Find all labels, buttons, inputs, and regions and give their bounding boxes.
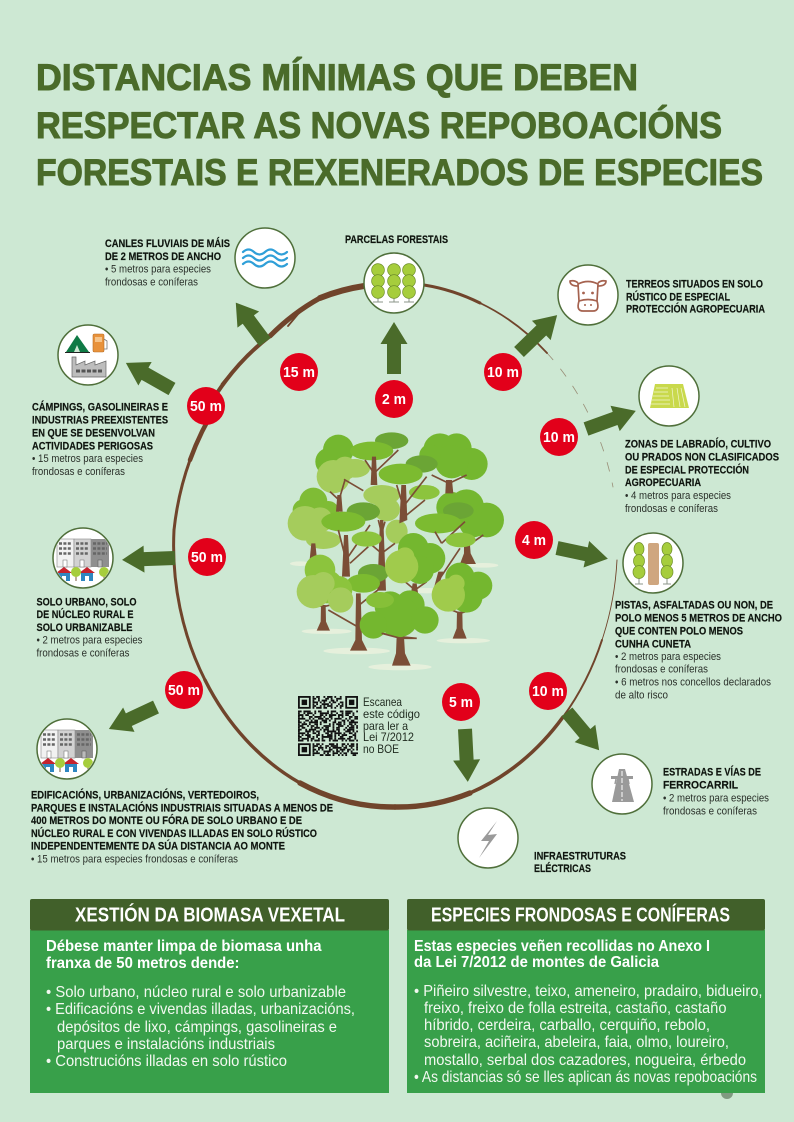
QR caption: no BOE (363, 742, 399, 756)
label: pistas (615, 600, 782, 702)
panel: xestión da biomasa vexetal (30, 899, 389, 1093)
label: zonas de labradío: • 4 metros para especies (625, 490, 731, 502)
arrow: to pistas (554, 535, 611, 572)
label: pistas: frondosas e coníferas (615, 664, 708, 676)
badge: 50 m edificacións (165, 671, 203, 709)
QR caption: para ler a (363, 719, 408, 733)
QR caption (363, 695, 420, 756)
label: canles fluviais (105, 237, 230, 288)
badge: 10 m terreos (484, 353, 522, 391)
icon: buildings and houses (solo urbano) (53, 528, 113, 588)
badge: 10 m terreos: 10 m (487, 364, 519, 381)
label: terreos: TERREOS SITUADOS EN SOLO (626, 278, 763, 290)
label: infraestruturas eléctricas: INFRAESTRUTURAS (534, 850, 626, 862)
label: edificacións (31, 788, 333, 866)
badge: 50 m solo urbano: 50 m (191, 549, 223, 566)
label: terreos: PROTECCIÓN AGROPECUARIA (626, 302, 765, 316)
arrow: to cámpings (119, 351, 179, 401)
label: estradas: FERROCARRIL (663, 780, 738, 792)
label: solo urbano (36, 596, 143, 660)
panel: especies frondosas e coníferas: híbrido, cerdeira, carballo, cerquiño, rebolo, (424, 1017, 710, 1034)
badge: 10 m labradío (540, 418, 578, 456)
badge: 50 m edificacións: 50 m (168, 682, 200, 699)
badge: 15 m (280, 353, 318, 391)
label: edificacións: 400 METROS DO MONTE OU FÓRA DE SOLO URBANO E DE (31, 814, 302, 827)
label: pistas: • 2 metros para especies (615, 651, 721, 663)
arrow: to infraestruturas eléctricas (452, 728, 481, 783)
label: cámpings: EN QUE SE DESENVOLVAN (32, 428, 155, 440)
badge: 50 m cámpings (187, 387, 225, 425)
badge: 50 m cámpings: 50 m (190, 398, 222, 415)
label: estradas: ESTRADAS E VÍAS DE (663, 766, 761, 778)
back canopies (288, 432, 504, 549)
title (36, 57, 763, 193)
label: cámpings: • 15 metros para especies (32, 453, 143, 465)
icon: cow head (558, 265, 618, 325)
icon: lightning bolt (458, 808, 518, 868)
label: zonas de labradío (625, 438, 779, 515)
panel header (407, 899, 765, 930)
icon: cultivated field (639, 366, 699, 426)
icon: tent, petrol pump and factory (58, 325, 118, 385)
arrow: to parcelas forestais (380, 322, 408, 374)
arrow: to canles fluviais (225, 295, 276, 350)
label: cámpings (32, 400, 168, 478)
label: pistas: CUNHA CUNETA (615, 638, 691, 650)
label: cámpings: frondosas e coníferas (32, 466, 125, 478)
label: infraestruturas eléctricas (534, 850, 626, 875)
central tree illustration (288, 432, 504, 670)
badge: 5 m: 5 m (449, 694, 473, 711)
panel header: XESTIÓN DA BIOMASA VEXETAL (75, 902, 345, 926)
label: zonas de labradío: frondosas e coníferas (625, 503, 718, 515)
QR caption: Lei 7/2012 (363, 730, 414, 744)
icon: water waves (235, 228, 295, 288)
label: edificacións: INDEPENDENTEMENTE DA SÚA DISTANCIA AO MONTE (31, 840, 285, 852)
icon: buildings and houses (edificacións) (37, 719, 97, 779)
panel: especies frondosas e coníferas: sobreira, aciñeira, abeleira, faia, olmo, loureiro, (424, 1034, 729, 1051)
panel: xestión da biomasa vexetal: depósitos de lixo, cámpings, gasolineiras e (57, 1019, 337, 1036)
label: estradas: frondosas e coníferas (663, 806, 757, 818)
label: pistas: QUE CONTEN POLO MENOS (615, 626, 743, 638)
badge: 50 m solo urbano (188, 538, 226, 576)
label: canles fluviais: • 5 metros para especies (105, 264, 211, 276)
arrow: to zonas de labradío (581, 398, 640, 442)
arrow: to estradas (557, 703, 609, 759)
badge: 5 m (442, 683, 480, 721)
icon: forest plots (364, 253, 424, 313)
arrow: to edificacións (103, 695, 162, 741)
label: solo urbano: SOLO URBANIZABLE (36, 622, 132, 634)
panel: xestión da biomasa vexetal: franxa de 50 metros dende: (46, 955, 240, 972)
panel: especies frondosas e coníferas: Estas especies veñen recollidas no Anexo I (414, 938, 710, 955)
label: solo urbano: • 2 metros para especies (36, 634, 143, 646)
badge: 10 m estradas (529, 672, 567, 710)
label: zonas de labradío: ZONAS DE LABRADÍO, CULTIVO (625, 438, 771, 450)
badge: 4 m (515, 521, 553, 559)
icon: track between trees (623, 533, 683, 593)
badge: 2 m (375, 380, 413, 418)
title: DISTANCIAS MÍNIMAS QUE DEBEN (36, 57, 638, 98)
label: solo urbano: DE NÚCLEO RURAL E (36, 608, 134, 621)
label: parcelas forestais: PARCELAS FORESTAIS (345, 234, 448, 246)
icon: motorway (592, 754, 652, 814)
brown brush ring (174, 285, 617, 807)
panel: especies frondosas e coníferas: da Lei 7/2012 de montes de Galicia (414, 954, 659, 971)
label: cámpings: CÁMPINGS, GASOLINEIRAS E (32, 400, 168, 414)
label: cámpings: INDUSTRIAS PREEXISTENTES (32, 414, 168, 426)
panel: xestión da biomasa vexetal: • Construcións illadas en solo rústico (46, 1053, 287, 1070)
title: RESPECTAR AS NOVAS REPOBOACIÓNS (36, 104, 722, 146)
label: canles fluviais: CANLES FLUVIAIS DE MÁIS (105, 237, 230, 250)
badge: 10 m estradas: 10 m (532, 683, 564, 700)
label: canles fluviais: frondosas e coníferas (105, 276, 198, 288)
front canopies (297, 533, 492, 639)
badge: 2 m: 2 m (382, 391, 406, 408)
label: edificacións: • 15 metros para especies frondosas e coníferas (31, 854, 238, 866)
label: pistas: • 6 metros nos concellos declarados (615, 676, 771, 688)
panel: xestión da biomasa vexetal: parques e instalacións industriais (57, 1036, 275, 1053)
label: estradas: • 2 metros para especies (663, 792, 769, 804)
small grey dot under right panel (721, 1087, 733, 1099)
panel: especies frondosas e coníferas (407, 899, 765, 1093)
panel: xestión da biomasa vexetal: Débese manter limpa de biomasa unha (46, 938, 322, 955)
arrow: to terreos (510, 305, 567, 362)
label: terreos (626, 278, 765, 316)
badge: 15 m: 15 m (283, 364, 315, 381)
panel header (30, 899, 389, 930)
label: edificacións: EDIFICACIÓNS, URBANIZACIÓNS, VERTEDOIROS, (31, 788, 259, 802)
arrow: to solo urbano (122, 545, 175, 573)
QR caption: este código (363, 707, 420, 721)
label: infraestruturas eléctricas: ELÉCTRICAS (534, 862, 591, 875)
label: edificacións: NÚCLEO RURAL E CON VIVENDAS ILLADAS EN SOLO RÚSTICO (31, 827, 317, 840)
panel: especies frondosas e coníferas: freixo, freixo de folla estreita, castaño, castaño (424, 1000, 727, 1017)
panel: xestión da biomasa vexetal: • Solo urbano, núcleo rural e solo urbanizable (46, 984, 346, 1001)
QR caption: Escanea (363, 695, 402, 709)
label: edificacións: PARQUES E INSTALACIÓNS INDUSTRIAIS SITUADAS A MENOS DE (31, 802, 333, 814)
badge: 4 m: 4 m (522, 532, 546, 549)
label: canles fluviais: DE 2 METROS DE ANCHO (105, 251, 221, 263)
label: pistas: de alto risco (615, 690, 668, 702)
label: zonas de labradío: DE ESPECIAL PROTECCIÓN (625, 464, 749, 476)
badge: 10 m labradío: 10 m (543, 429, 575, 446)
panel: especies frondosas e coníferas: mostallo, serbal dos cazadores, nogueira, érbedo (424, 1052, 746, 1069)
panel: xestión da biomasa vexetal: • Edificacións e vivendas illadas, urbanizacións, (46, 1001, 355, 1018)
label: terreos: RÚSTICO DE ESPECIAL (626, 290, 730, 304)
label: solo urbano: SOLO URBANO, SOLO (36, 596, 137, 608)
label: solo urbano: frondosas e coníferas (36, 648, 130, 660)
QR code (298, 697, 358, 755)
label: cámpings: ACTIVIDADES PERIGOSAS (32, 440, 153, 452)
label: estradas (663, 766, 769, 818)
panel: especies frondosas e coníferas: • Piñeiro silvestre, teixo, ameneiro, pradairo, bidueiro, (414, 983, 762, 1000)
label: zonas de labradío: AGROPECUARIA (625, 477, 701, 489)
